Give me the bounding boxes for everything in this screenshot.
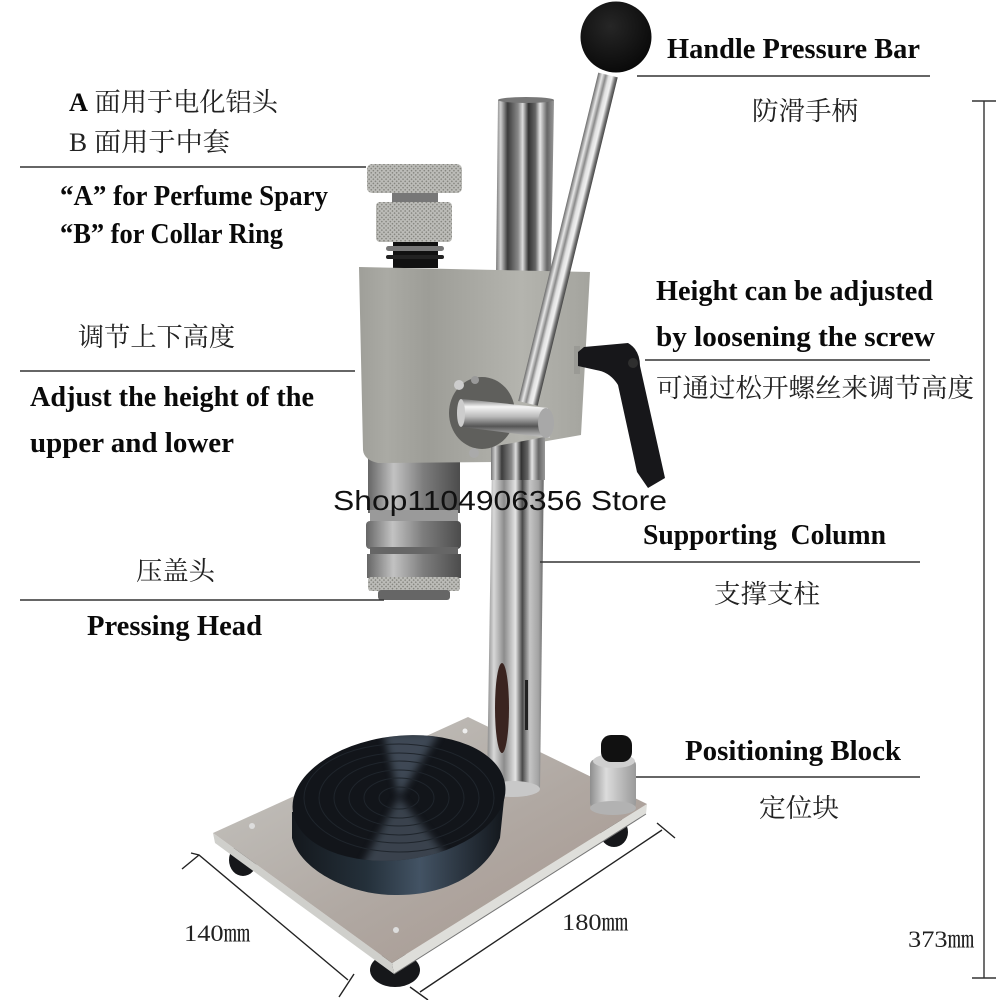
Chinese: 调节上下高度 [78, 323, 235, 352]
leader line [20, 166, 366, 168]
illustration: capping press machine [213, 2, 665, 987]
dark reflection [525, 680, 528, 730]
column lower section [487, 460, 544, 790]
English: Adjust the height of the [30, 382, 314, 413]
Chinese: 可通过松开螺丝来调节高度 [656, 374, 974, 403]
leader line [20, 370, 355, 372]
upper knurled knobs and spring [367, 164, 462, 268]
leader line [636, 776, 920, 778]
leader line [645, 359, 930, 361]
aluminium block [359, 267, 590, 463]
dimension line [182, 853, 354, 997]
black disc [292, 735, 506, 895]
leader line [637, 75, 930, 77]
icon: foot pads [229, 817, 628, 987]
round plate with screws [449, 376, 515, 458]
Chinese heading A: A 面用于电化铝头 [69, 88, 279, 117]
lever rod [518, 73, 618, 406]
label: supporting column [540, 520, 920, 609]
Chinese heading B: B 面用于中套 [69, 128, 230, 157]
leader line [540, 561, 920, 563]
column base [486, 781, 540, 797]
dimension line [410, 823, 675, 1000]
English: Positioning Block [685, 736, 901, 767]
base plate [213, 717, 647, 974]
dimension: 180mm width [410, 823, 675, 1000]
English: Pressing Head [87, 611, 262, 642]
English B: “B” for Collar Ring [60, 219, 283, 250]
English: Height can be adjusted [656, 276, 933, 307]
label: height adjustment [645, 276, 974, 403]
dimension value: 180㎜ [562, 910, 629, 935]
watermark: Shop1104906356 Store [333, 485, 667, 516]
Chinese: 支撑支柱 [714, 580, 820, 609]
label: positioning block [636, 736, 920, 823]
English: Handle Pressure Bar [667, 34, 920, 65]
label: handle pressure bar [637, 34, 930, 126]
locking handle [574, 343, 665, 488]
column upper section [496, 97, 554, 275]
label: adjust height [20, 323, 355, 459]
English second line: by loosening the screw [656, 322, 936, 353]
pivot pin [457, 399, 554, 438]
dimension line [972, 101, 996, 978]
supporting column [486, 460, 544, 797]
dimension: 140mm depth [182, 853, 354, 997]
English second line: upper and lower [30, 428, 234, 459]
dimension value: 373㎜ [908, 927, 975, 952]
reflection on column [495, 663, 509, 753]
column below block [491, 437, 545, 480]
English A: “A” for Perfume Spary [60, 181, 328, 212]
pressing head [366, 455, 461, 600]
positioning block [590, 735, 636, 815]
label: pressing head [20, 557, 384, 642]
dimension value: 140㎜ [184, 921, 251, 946]
label: A/B faces [20, 88, 366, 250]
dimension: 373mm height [908, 101, 996, 978]
English: Supporting Column [643, 520, 886, 551]
Chinese: 防滑手柄 [752, 97, 858, 126]
Chinese: 定位块 [759, 794, 839, 823]
ball knob [580, 2, 652, 72]
leader line [20, 599, 384, 601]
Chinese: 压盖头 [136, 557, 216, 586]
